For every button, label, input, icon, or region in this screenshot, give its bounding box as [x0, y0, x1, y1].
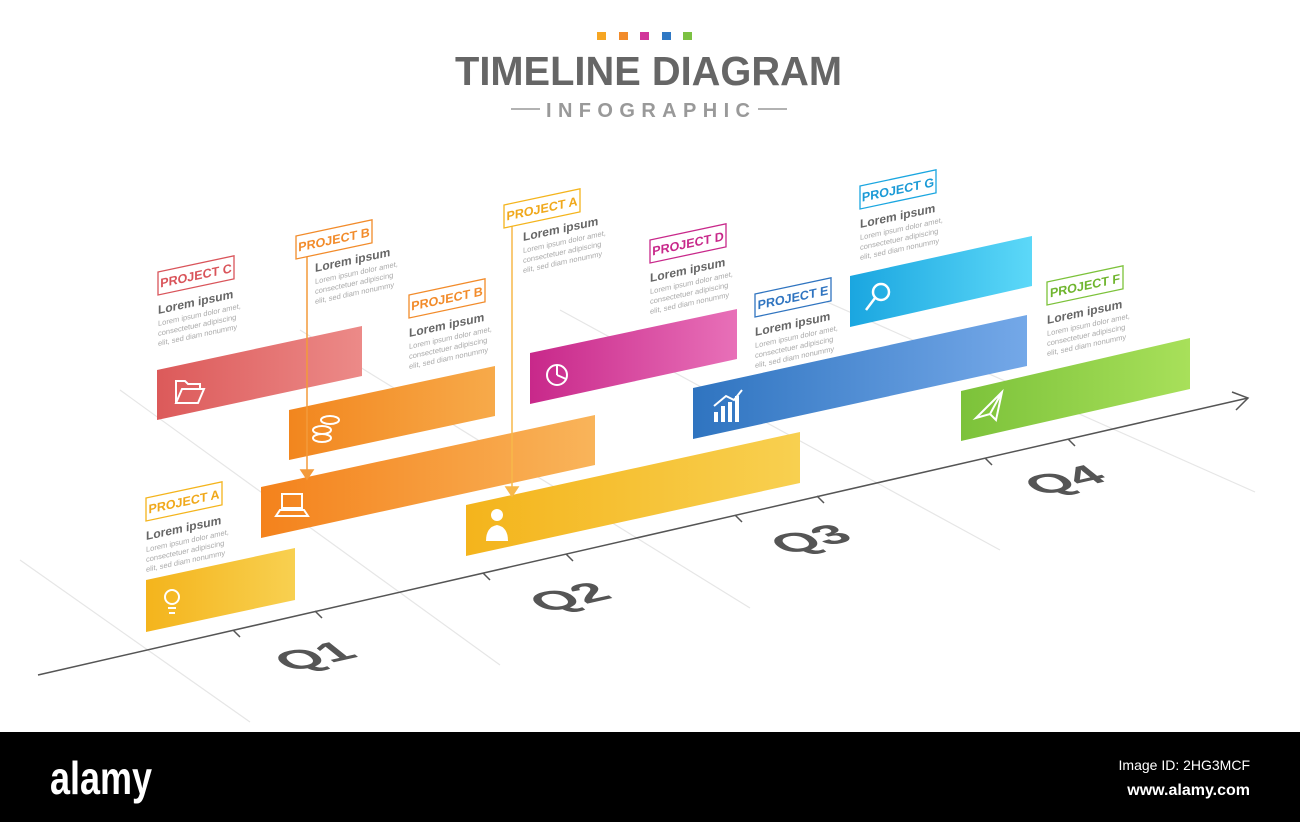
title dots — [597, 32, 692, 40]
footer image id: Image ID: 2HG3MCF — [1119, 757, 1250, 773]
label: project B top: elit, sed diam nonummy — [315, 280, 394, 306]
bar: project G — [850, 236, 1032, 327]
icon: pie — [547, 365, 567, 385]
bar: project B lower — [261, 415, 595, 538]
icon: paper plane — [976, 392, 1002, 420]
label: project B top: consectetuer adipiscing — [315, 270, 393, 296]
label: project G: consectetuer adipiscing — [860, 226, 938, 252]
label: project B middle: PROJECT B — [411, 284, 483, 313]
label: project G — [860, 168, 943, 262]
label: project F — [1047, 264, 1130, 358]
label: project C — [158, 254, 241, 348]
label: project G: elit, sed diam nonummy — [860, 236, 939, 262]
icon: folder — [176, 381, 204, 403]
label: project C: PROJECT C — [160, 261, 232, 290]
label: project G: Lorem ipsum dolor amet, — [860, 215, 943, 242]
label: project A top: elit, sed diam nonummy — [523, 249, 602, 275]
label: project A top: PROJECT A — [507, 194, 577, 223]
axis — [38, 392, 1248, 675]
icon: laptop — [276, 494, 308, 516]
label: project A top: Lorem ipsum — [523, 214, 599, 244]
label: project E: Lorem ipsum dolor amet, — [755, 323, 838, 350]
quarter labels: Q1 — [263, 635, 366, 677]
quarter labels: Q4 — [1013, 459, 1116, 501]
arrow: project B link — [301, 250, 313, 479]
label: project E: PROJECT E — [758, 284, 828, 312]
label: project A bottom: PROJECT A — [149, 487, 219, 516]
label: project C: Lorem ipsum — [158, 287, 234, 317]
icon: coins — [313, 416, 339, 442]
label: project B top — [296, 214, 398, 310]
label: project A bottom — [146, 480, 229, 574]
label: project D: PROJECT D — [652, 229, 724, 258]
bar: project C — [157, 326, 362, 420]
footer url: www.alamy.com — [1126, 782, 1250, 799]
label: project G: Lorem ipsum — [860, 201, 936, 231]
label: project A bottom: Lorem ipsum — [146, 513, 222, 543]
label: project B middle: Lorem ipsum dolor amet, — [409, 324, 492, 351]
icon: chart — [714, 390, 742, 422]
label: project C: Lorem ipsum dolor amet, — [158, 301, 241, 328]
arrow: project A link — [506, 222, 518, 496]
quarter labels — [263, 459, 1116, 677]
label: project E — [755, 276, 838, 370]
label: project F: consectetuer adipiscing — [1047, 322, 1125, 348]
footer logo: alamy — [50, 752, 152, 804]
label: project A bottom: elit, sed diam nonummy — [146, 548, 225, 574]
bar: project B upper — [289, 366, 495, 460]
label: project A top: Lorem ipsum dolor amet, — [523, 228, 606, 255]
bar: project A small — [146, 548, 295, 632]
footer bar — [0, 732, 1300, 822]
bar: project A big — [466, 432, 800, 556]
label: project D: consectetuer adipiscing — [650, 280, 728, 306]
label: project F: PROJECT F — [1050, 272, 1120, 300]
label: project G: PROJECT G — [862, 175, 934, 205]
label: project D: Lorem ipsum dolor amet, — [650, 269, 733, 296]
label: project F: elit, sed diam nonummy — [1047, 332, 1126, 358]
label: project D — [650, 222, 733, 316]
label: project B top: Lorem ipsum dolor amet, — [315, 259, 398, 286]
icon: person — [486, 509, 508, 541]
label: project D: Lorem ipsum — [650, 255, 726, 285]
quarter labels: Q3 — [759, 518, 862, 560]
bar: project E — [693, 315, 1027, 439]
subtitle: INFOGRAPHIC — [546, 100, 750, 122]
title: TIMELINE DIAGRAM — [455, 48, 842, 94]
label: project A top: consectetuer adipiscing — [523, 239, 601, 265]
label: project B middle: Lorem ipsum — [409, 310, 485, 340]
icon: magnifier — [866, 284, 889, 310]
icon: bulb — [165, 590, 179, 613]
quarter labels: Q2 — [518, 576, 621, 618]
label: project E: consectetuer adipiscing — [755, 334, 833, 360]
label: project C: consectetuer adipiscing — [158, 312, 236, 338]
label: project E: elit, sed diam nonummy — [755, 344, 834, 370]
label: project B middle: consectetuer adipiscing — [409, 335, 487, 361]
bar: project F — [961, 338, 1190, 441]
label: project D: elit, sed diam nonummy — [650, 290, 729, 316]
label: project B middle: elit, sed diam nonummy — [409, 345, 488, 371]
label: project F: Lorem ipsum — [1047, 297, 1123, 327]
label: project F: Lorem ipsum dolor amet, — [1047, 311, 1130, 338]
bar: project D — [530, 309, 737, 404]
label: project A bottom: consectetuer adipiscing — [146, 538, 224, 564]
label: project B top: PROJECT B — [298, 225, 370, 254]
grid lines (decor) — [20, 290, 1255, 722]
label: project E: Lorem ipsum — [755, 309, 831, 339]
label: project B top: Lorem ipsum — [315, 245, 391, 275]
label: project A bottom: Lorem ipsum dolor amet, — [146, 527, 229, 554]
label: project C: elit, sed diam nonummy — [158, 322, 237, 348]
label: project A top — [504, 183, 606, 279]
label: project B middle — [409, 277, 492, 371]
